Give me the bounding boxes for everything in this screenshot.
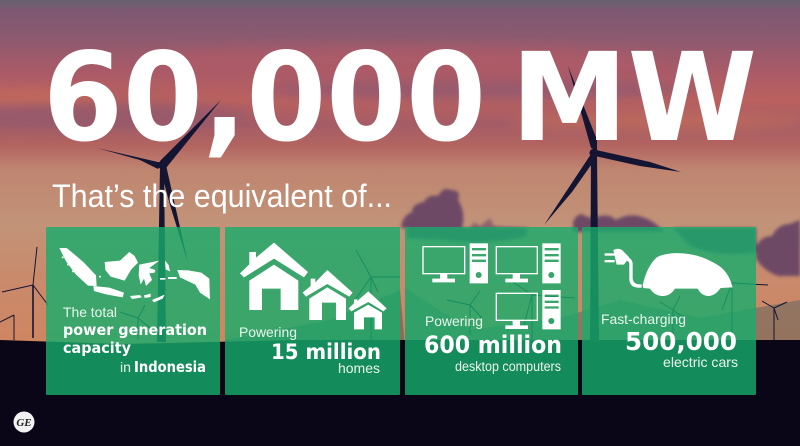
title [43, 27, 757, 169]
title: 60,000 [43, 27, 486, 169]
background: small turbines [0, 247, 787, 340]
title: MW [511, 27, 757, 169]
text: Powering 600 million desktop computers: 600 million [424, 331, 562, 359]
text: Powering 600 million desktop computers: Powering [425, 313, 483, 329]
background: clouds [401, 189, 800, 276]
text: The total power generation capacity in Indonesia: Indonesia [134, 358, 206, 376]
background: dark ground [0, 340, 800, 446]
text: Powering 15 million homes [239, 324, 381, 376]
GE logo: GE [16, 417, 32, 429]
right large wind turbine [544, 66, 681, 342]
icon: three houses [240, 243, 387, 329]
GE logo [14, 412, 34, 432]
panel: electric cars [582, 227, 756, 395]
icon: electric car with plug [605, 249, 733, 296]
text: Powering 15 million homes: Powering [239, 324, 297, 340]
text: The total power generation capacity in Indonesia: capacity [63, 339, 131, 357]
text: The total power generation capacity in Indonesia: The total [63, 304, 117, 320]
left large wind turbine [97, 100, 221, 342]
text: The total power generation capacity in Indonesia: in [120, 359, 131, 375]
text: Fast-charging 500,000 electric cars: electric cars [663, 354, 738, 370]
text: Powering 15 million homes: 15 million [271, 340, 381, 364]
text: Powering 600 million desktop computers [424, 313, 562, 374]
icon: map of Indonesia [59, 248, 210, 302]
icon: three desktop computers [423, 243, 561, 329]
text: Powering 15 million homes: homes [338, 360, 380, 376]
text: Powering 600 million desktop computers: desktop computers [455, 359, 561, 374]
text: Fast-charging 500,000 electric cars: Fast-charging [601, 311, 686, 327]
background: distant hills [225, 288, 800, 346]
text: The total power generation capacity in Indonesia: power generation [63, 321, 207, 339]
text: Fast-charging 500,000 electric cars: 500,000 [625, 327, 737, 356]
panel: computers [405, 227, 578, 395]
text: Fast-charging 500,000 electric cars [601, 311, 738, 370]
subtitle: That’s the equivalent of... [52, 178, 392, 214]
text: The total power generation capacity in Indonesia [63, 304, 207, 376]
panel: homes [225, 227, 400, 395]
panel: Indonesia [46, 227, 220, 395]
background: sunset sky [0, 0, 800, 346]
